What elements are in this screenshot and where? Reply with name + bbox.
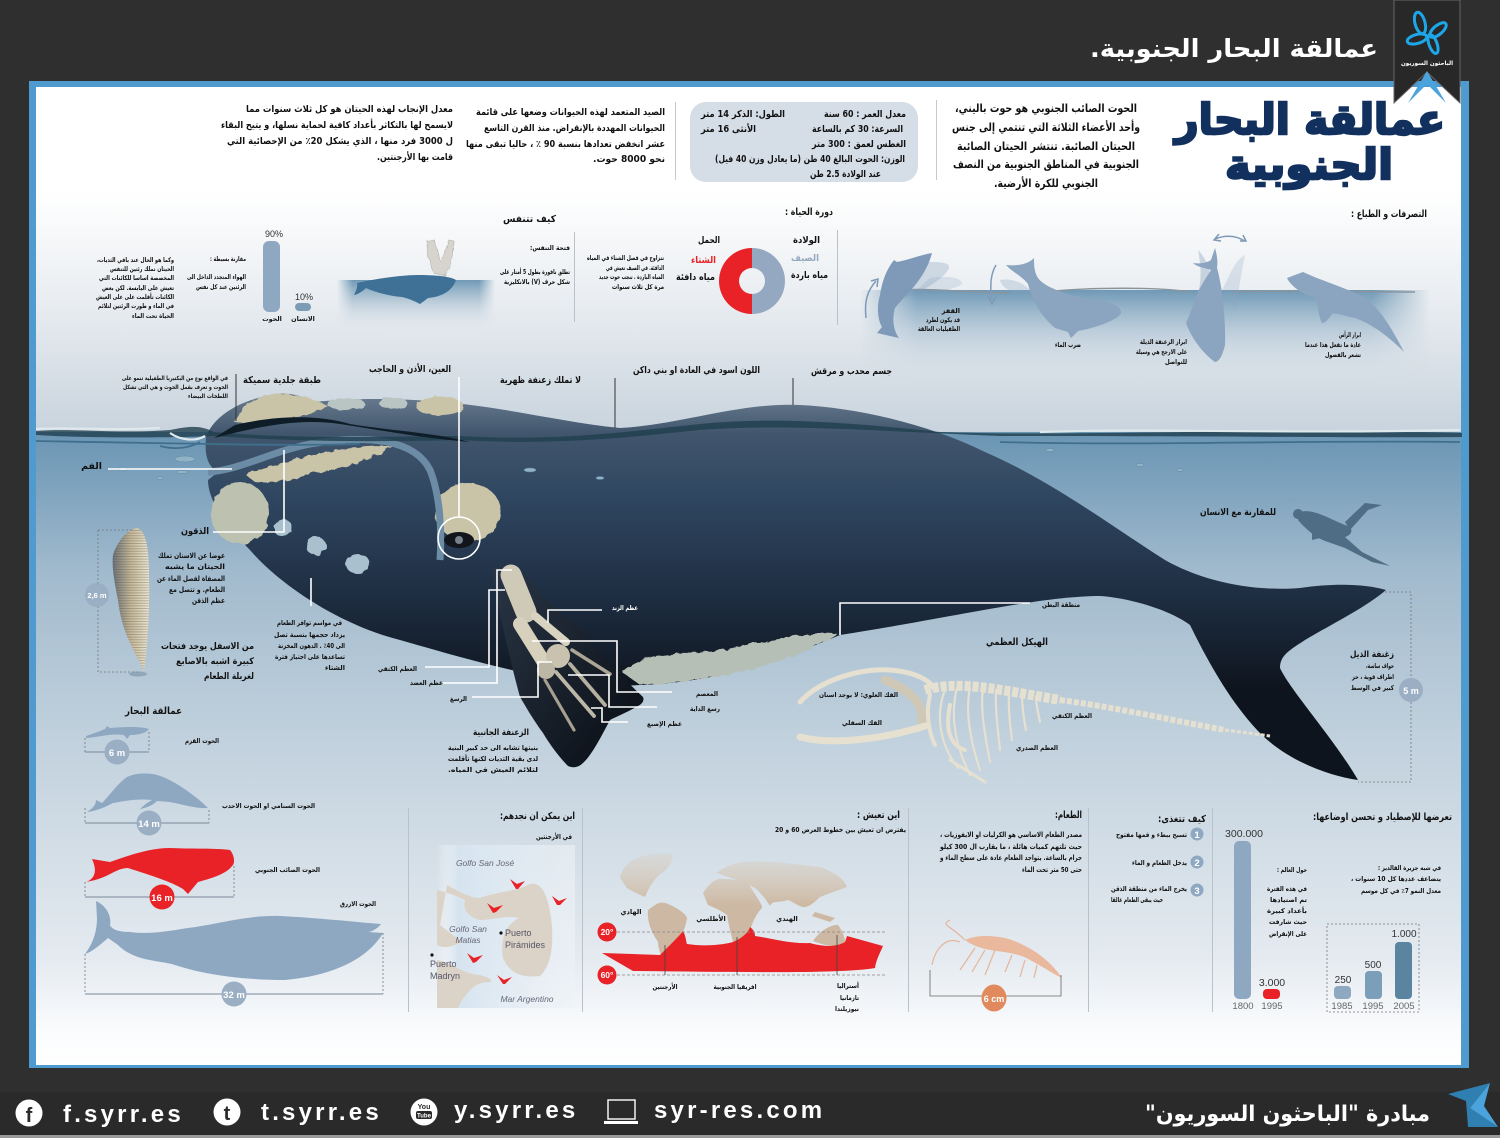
- blue whale: 32 m: [223, 990, 245, 1001]
- map: world: [598, 854, 887, 984]
- icon: diver: [1283, 489, 1390, 566]
- panel: food: [930, 810, 1082, 1012]
- dividers: [408, 808, 1213, 1012]
- text: world: في هذه الفترة: [1267, 885, 1307, 893]
- text: hunting: عشر انخفض تعدادها بنسبة 90 ٪ ، حاليا تبقى منها: [466, 139, 665, 150]
- panel: food: الطعام:: [1055, 810, 1082, 821]
- text: head: [1305, 330, 1361, 359]
- stats box: الوزن: الحوت البالغ 40 طن (ما يعادل وزن 40 فيل): [715, 154, 905, 165]
- arrow: slap: [988, 265, 996, 304]
- bar chart: recovery: 1995: [1362, 1001, 1384, 1012]
- callout: thick skin: طبقة جلدية سميكة: [243, 375, 321, 386]
- blue whale: [85, 900, 383, 1006]
- text: life cycle: الدافئة. في الصيف تعيش في: [606, 264, 664, 272]
- text: tail: على الارجح هي وسيلة: [1136, 348, 1187, 356]
- bar chart: world population: 1995: [1261, 1001, 1283, 1012]
- intro text: الجنوبي للكرة الأرضية.: [994, 176, 1098, 190]
- text: world: على الإنقراض: [1269, 930, 1307, 938]
- callout: human comparison: للمقارنة مع الانسان: [1200, 507, 1276, 518]
- panel: life cycle: مياه دافئة: [676, 272, 715, 283]
- panel: how it feeds: 3: [1194, 886, 1200, 897]
- panel: where they live: اين تعيش :: [857, 810, 900, 821]
- callout: body shape: [793, 366, 892, 405]
- panel: how it feeds: كيف تتغذى:: [1158, 814, 1206, 825]
- icon: whale markers: [467, 879, 567, 984]
- panel: where to find them: [430, 811, 575, 1008]
- bar chart: lungs: الانسان: [291, 315, 315, 323]
- bar chart: world population: 3.000: [1259, 977, 1285, 989]
- text: baleen gaps: من الاسفل يوجد فتحات: [161, 642, 254, 652]
- text: head: عادة ما تفعل هذا عندما: [1305, 341, 1361, 349]
- map: Argentina: Madryn: [430, 971, 460, 981]
- flipper: [492, 568, 643, 767]
- text: head: ابراز الرأس: [1339, 330, 1361, 339]
- text: flipper: بنيتها تشابه الى حد كبير البنية: [448, 744, 538, 752]
- text: skin parasites: في الواقع نوع من البكتيريا الطفيلية تنمو على: [122, 375, 228, 382]
- humpback: [85, 773, 315, 836]
- text: head: تشعر بالفضول: [1325, 351, 1361, 359]
- panel: how it feeds: يدخل الطعام و الماء: [1132, 859, 1187, 867]
- panel: how it feeds: 2: [1194, 858, 1200, 869]
- panel: how it feeds: 1: [1194, 830, 1200, 841]
- text: baleen gaps: [161, 642, 255, 682]
- pygmy whale: الحوت القزم: [185, 737, 219, 745]
- text: world: تم اصتيادها: [1270, 896, 1307, 904]
- icon: tail slap whale: [1000, 258, 1121, 338]
- callout: fat: يزداد حجمها بنسبة تصل: [274, 631, 345, 639]
- text: Valdes: [1351, 864, 1441, 895]
- panel: life cycle: الولادة: [793, 235, 820, 246]
- lip: [208, 440, 441, 560]
- ribs: [940, 688, 1040, 775]
- icon: facebook: [16, 1100, 42, 1127]
- intro text: الحيتان الصائبة. تنتشر الحيتان الصائبة: [957, 139, 1135, 153]
- stats box: [690, 102, 918, 182]
- bar chart: lungs: 90%: [265, 229, 283, 239]
- callout: baleen: [181, 450, 284, 537]
- flipper bone labels: رسغ الداية: [690, 705, 720, 713]
- text: Valdes: يتضاعف عددها كل 10 سنوات ،: [1351, 875, 1441, 883]
- text: hunting: نحو 8000 حوت.: [593, 154, 665, 165]
- text: baleen: [157, 551, 225, 605]
- illustration: right whale: [206, 394, 1386, 780]
- text: Valdes: معدل النمو 7٪ في كل موسم: [1361, 887, 1441, 895]
- blue whale: الحوت الازرق: [340, 900, 376, 908]
- panel: hunting and recovery: [1225, 812, 1452, 1012]
- map: Argentina: Mar Argentino: [500, 994, 554, 1004]
- pygmy whale: 6 m: [109, 748, 125, 759]
- text: comparison: الهواء المتجدد الداخل الى: [187, 273, 246, 281]
- intro text: وأحد الأعضاء الثلاثة التي تنتمي إلى جنس: [952, 120, 1140, 134]
- stats box: عند الولادة 2.5 طن: [810, 169, 881, 180]
- belly patch: [622, 633, 838, 685]
- callout: tail: زغنفة الذيل: [1350, 650, 1394, 660]
- stats box: الطول: الذكر 14 متر: [700, 109, 785, 120]
- text: baleen gaps: لغربلة الطعام: [204, 672, 254, 682]
- map: world: 60°: [601, 970, 614, 980]
- stats box: معدل العمر : 60 سنة: [824, 109, 906, 120]
- text: life cycle: المياه الباردة . تنجب حوت جديد: [599, 273, 664, 281]
- text: flipper: لدى بقية الثديات لكنها تأقلمت: [448, 754, 538, 763]
- callout: body shape: جسم محدب و مرقش: [811, 366, 892, 377]
- stats box: الأنثى 16 متر: [700, 123, 756, 135]
- panel: how it feeds: حيث يبقى الطعام عالقا: [1111, 896, 1163, 904]
- southern right whale: [85, 848, 320, 910]
- text: tail: [1136, 338, 1187, 366]
- icon: youtube: [410, 1098, 438, 1126]
- panel: behaviours: التصرفات و الطباع :: [1351, 209, 1427, 220]
- text: lungs: تعيش على اليابسة. لكن بعض: [102, 284, 174, 292]
- icon: facebook: f: [26, 1105, 33, 1127]
- icon: spy hop whale: [1287, 272, 1404, 352]
- callout: no dorsal fin: لا تملك زعنفة ظهرية: [500, 375, 581, 386]
- text: skin parasites: اللطخات البيضاء: [188, 394, 228, 400]
- callout: colour: اللون اسود في العادة او بني داكن: [633, 365, 760, 376]
- text: jump: الطفيليات العالقة: [918, 325, 960, 333]
- callosities: [211, 394, 501, 574]
- text: slap: ضرب الماء: [1055, 341, 1081, 349]
- text: life cycle: [587, 254, 664, 291]
- bubbles: [118, 448, 1183, 480]
- map: Argentina: Golfo San José: [456, 858, 514, 868]
- callout: belly: [840, 601, 1080, 635]
- text: flipper: [448, 728, 538, 774]
- humpback: الحوت السنامي او الحوت الاحدب: [222, 802, 315, 810]
- text: jump: قد يكون لطرد: [926, 316, 960, 324]
- flipper bone labels: العظم الكتفي: [378, 665, 417, 673]
- text: reproduction: معدل الإنجاب لهذه الحيتان هو كل ثلاث سنوات مما: [246, 104, 453, 115]
- pygmy whale: [85, 726, 219, 764]
- ribbon logo: [1394, 0, 1460, 103]
- panel: how it feeds: يخرج الماء من منطقة الذقن: [1111, 885, 1187, 893]
- stats box: الغطس لعمق : 300 متر: [811, 139, 906, 150]
- text: lungs: الحيتان تملك رئتين للتنفس: [110, 265, 174, 273]
- icon: baleen plate: [85, 528, 149, 676]
- arrow: double: [1214, 234, 1246, 241]
- icon: breach whale: [877, 253, 962, 338]
- text: reproduction: ل 3000 فرد منها ، الذي يشكل 20٪ من الإحصائية التي: [227, 136, 453, 147]
- callout: fat: [274, 578, 345, 672]
- icon: eye: [438, 517, 480, 559]
- icon: twitter: t: [224, 1103, 231, 1125]
- panel: life cycle: [574, 207, 838, 325]
- panel: life cycle: دورة الحياة :: [785, 207, 833, 218]
- bar chart: world population: 300.000: [1225, 828, 1263, 840]
- map: Argentina: Golfo San: [449, 924, 487, 934]
- panel: giants of the sea: عمالقة البحار: [124, 706, 182, 717]
- illustration: skeleton: العظم الصدري: [1016, 744, 1058, 752]
- panel: where they live: الهادي: [620, 908, 642, 916]
- text: lungs: وكما هو الحال عند باقي الثديات،: [97, 256, 174, 264]
- text: baleen: عوضا عن الاسنان تملك: [158, 551, 225, 560]
- text: baleen: عظم الذقن: [192, 596, 225, 605]
- panel: where they live: افريقيا الجنوبية: [714, 983, 756, 991]
- panel: giants of the sea: [85, 706, 383, 1006]
- text: skin parasites: [122, 375, 228, 400]
- text: flipper: الزعنفة الجانبية: [473, 728, 529, 738]
- southern right whale: الحوت الصائب الجنوبي: [255, 866, 320, 874]
- bar chart: recovery: 1.000: [1391, 929, 1417, 940]
- panel: where they live: [598, 810, 906, 1013]
- panel: where they live: الأرجنتين: [652, 982, 678, 991]
- text: comparison: مقارنة بسيطة :: [210, 255, 246, 263]
- footer: [0, 1083, 1500, 1138]
- panel: food: 6 cm: [984, 994, 1004, 1004]
- text: baleen: المصفاة لفصل الماء عن: [157, 574, 225, 583]
- footer: y.syrr.es: [454, 1097, 578, 1124]
- bar chart: lungs: الحوت: [262, 315, 282, 323]
- main title: الجنوبية: [1225, 140, 1393, 190]
- illustration: whale blowing: [338, 239, 494, 320]
- panel: life cycle: الحمل: [698, 235, 720, 246]
- text: tail: للتواصل: [1165, 358, 1187, 366]
- text: life cycle: مرة كل ثلاث سنوات: [612, 283, 664, 291]
- callout: tail: [1350, 592, 1423, 782]
- panel: food: جرام بالساعة. يتواجد الطعام عادة على سطح الماء و: [939, 854, 1082, 862]
- callout: belly: منطقة البطن: [1042, 601, 1080, 609]
- text: blowhole: شكل حرف (V) بالانكليزية: [504, 278, 570, 286]
- footer: syr-res.com: [654, 1097, 825, 1124]
- footer: f.syrr.es: [63, 1101, 184, 1128]
- panel: food: حيث تلتهم كميات هائلة ، ما يقارب ال 300 كيلو: [939, 843, 1082, 851]
- callout: tail: حواف ساسة،: [1366, 662, 1394, 670]
- panel: how it feeds: [1111, 814, 1206, 904]
- text: world: بأعداد كبيرة: [1267, 906, 1307, 915]
- southern right whale: 16 m: [151, 893, 173, 904]
- panel: breathing: [337, 214, 570, 330]
- bar chart: world population: 1800: [1232, 1001, 1254, 1012]
- text: blowhole: [500, 244, 570, 286]
- panel: how it feeds: تسبح ببطء و فمها مفتوح: [1116, 831, 1187, 839]
- icon: laptop: [604, 1100, 638, 1124]
- callout: fat: في مواسم توافر الطعام: [277, 619, 342, 627]
- panel: where to find them: اين يمكن ان نجدهم:: [500, 811, 575, 822]
- ribbon logo: الباحثون السوريون: [1401, 61, 1453, 67]
- icon: tail display whale: [1186, 248, 1245, 362]
- spine: [925, 686, 1270, 736]
- map: Argentina: Matias: [455, 935, 481, 945]
- callout: fat: الى 40٪ . الدهون المخزنة: [278, 642, 345, 650]
- main title: عمالقة البحار: [1173, 95, 1445, 144]
- text: Valdes: في شبه جزيرة الفالديز :: [1378, 864, 1441, 872]
- text: baleen: الطعام. و تتصل مع: [169, 585, 225, 594]
- callout: tail: 5 m: [1403, 686, 1419, 696]
- text: comparison: الرئتين عند كل نفس: [196, 283, 246, 291]
- text: blowhole: فتحة التنفس:: [530, 244, 570, 252]
- skull and jaws: [800, 670, 935, 745]
- text: hunting: الحيوانات المهددة بالإنقراض. منذ القرن التاسع: [484, 123, 665, 134]
- bar chart: recovery: 1985: [1331, 1001, 1353, 1012]
- text: world: [1267, 866, 1307, 938]
- main title: [1173, 95, 1445, 190]
- text: comparison: [187, 255, 246, 291]
- icon: flower logo: [1406, 11, 1449, 55]
- illustration: skeleton: الفك العلوي: لا يوجد اسنان: [819, 691, 898, 699]
- panel: life cycle: الصيف: [791, 253, 819, 264]
- panel: hunting and recovery: تعرضها للإصطياد و تحسن اوضاعها:: [1313, 812, 1452, 823]
- panel: food: مصدر الطعام الاساسي هو الكرليات او الايفوزيات ،: [940, 831, 1082, 839]
- panel: where they live: نيوزيلندا: [835, 1005, 859, 1013]
- bar chart: lungs: 10%: [295, 292, 313, 302]
- text: reproduction: لايسمح لها بالتكاثر بأعداد كافية لحماية نسلها، و يتيح البقاء: [221, 118, 453, 131]
- illustration: skeleton: [800, 637, 1270, 782]
- map: Argentina: Pirámides: [505, 940, 546, 950]
- intro text: الجنوبية في المناطق الجنوبية من النصف: [953, 157, 1139, 171]
- text: lungs: الكائنات تأقلمت على على العيش: [96, 292, 174, 301]
- scale marker: [982, 984, 1006, 1012]
- illustration: skeleton: العظم الكتفي: [1052, 712, 1092, 720]
- illustration: skeleton: الفك السفلي: [842, 719, 882, 727]
- text: hunting: [466, 102, 676, 180]
- text: lungs: [96, 256, 174, 320]
- text: life cycle: تتزاوج في فصل الشتاء في المياه: [587, 254, 664, 262]
- icon: krill: [932, 920, 1062, 978]
- icon: youtube: You: [418, 1104, 430, 1111]
- callout: mouth: الفم: [81, 461, 102, 472]
- map: Argentina: Puerto: [505, 928, 532, 938]
- map: world: 20°: [601, 927, 614, 937]
- illustration: skeleton: الهيكل العظمي: [986, 637, 1048, 648]
- callout: eye: العين، الأذن و الحاجب: [369, 363, 451, 375]
- text: lungs: الحياة تحت الماء: [132, 312, 174, 320]
- flipper bone labels: المعصم: [696, 690, 718, 698]
- callout: fat: الشتاء: [325, 664, 345, 672]
- bar chart: lungs: [262, 229, 315, 323]
- text: baleen gaps: كبيرة اشبه بالاصابع: [176, 657, 255, 667]
- icon: baleen plate: 2,6 m: [87, 591, 107, 600]
- panel: where to find them: في الأرجنتين: [536, 832, 572, 841]
- text: jump: القفز: [941, 307, 960, 315]
- panel: where they live: يفترض ان تعيش بين خطوط العرض 60 و 20: [775, 826, 906, 834]
- text: jump: [918, 307, 960, 333]
- intro text: الحوت الصائب الجنوبي هو حوت باليني،: [955, 101, 1137, 115]
- panel: breathing: كيف تتنفس: [503, 214, 556, 225]
- header title: عمالقة البحار الجنوبية.: [1090, 34, 1378, 64]
- icon: twitter: [214, 1098, 240, 1126]
- flipper bone labels: عظم الإصبع: [647, 720, 682, 728]
- text: flipper: لتلائم العيش في المياه.: [448, 766, 538, 774]
- text: tail: ابراز الزعنفة الذيلة: [1140, 338, 1187, 346]
- icon: youtube: Tube: [417, 1114, 432, 1120]
- footer: t.syrr.es: [261, 1099, 382, 1126]
- text: lungs: المخصصة اساسا للكائنات التي: [99, 274, 174, 282]
- text: world: حول العالم :: [1277, 866, 1307, 874]
- footer initiative text: مبادرة "الباحثون السوريون": [1145, 1102, 1430, 1127]
- map: Argentina: Puerto: [430, 959, 457, 969]
- panel: food: حتى 50 متر تحت الماء: [1022, 866, 1082, 874]
- panel: where they live: الهندي: [776, 915, 798, 923]
- water surface: [36, 417, 1462, 448]
- arrow: jump: [865, 279, 878, 318]
- stats box: السرعة: 30 كم بالساعة: [812, 124, 903, 135]
- bar chart: world population: [1225, 828, 1285, 1012]
- panel: where they live: أستراليا: [837, 981, 859, 990]
- text: baleen: الحيتان ما يشبه: [165, 562, 225, 571]
- flipper bones: [511, 575, 610, 730]
- callout: tail: اطراف قوية ، حز: [1351, 673, 1394, 681]
- map: Argentina: [430, 845, 575, 1008]
- text: hunting: الصيد المتعمد لهذه الحيوانات وضعها على قائمة: [476, 107, 665, 118]
- flipper bone labels: [378, 570, 720, 728]
- panel: where they live: تازمانيا: [840, 994, 859, 1002]
- icon: footer logo: [1448, 1083, 1498, 1127]
- callout: thick skin: [236, 374, 321, 421]
- panel: life cycle: مياه باردة: [791, 270, 828, 281]
- callout: baleen: الذقون: [181, 526, 209, 537]
- bar chart: recovery: 500: [1365, 960, 1382, 971]
- flipper bone labels: عظم الزند: [612, 604, 638, 612]
- flipper bone labels: عظم العضد: [410, 679, 443, 687]
- intro text: [952, 101, 1140, 190]
- callout: tail: كبير في الوسط: [1351, 684, 1394, 692]
- bar chart: recovery: 2005: [1393, 1001, 1415, 1012]
- donut chart: [719, 248, 785, 314]
- bar chart: recovery: 250: [1335, 975, 1352, 986]
- callout: fat: تساعدها على اجتياز فترة: [275, 653, 345, 661]
- text: reproduction: [221, 104, 453, 163]
- panel: behaviours: [860, 209, 1430, 380]
- panel: life cycle: الشتاء: [691, 255, 716, 266]
- text: lungs: في الماء و طورت الرئتين لتلائم: [98, 302, 174, 310]
- text: blowhole: تطلق نافورة بطول 5 أمتار على: [500, 267, 570, 276]
- pelvis and sternum: [948, 705, 985, 782]
- flipper bone labels: الرسغ: [450, 695, 467, 703]
- text: reproduction: قامت بها الأرجنتين.: [377, 151, 453, 163]
- text: world: حيث شارفت: [1269, 918, 1307, 926]
- bar chart: recovery: [1327, 924, 1419, 1012]
- panel: where they live: الأطلسي: [696, 914, 726, 923]
- text: skin parasites: الحوت و تعرف بقمل الحوت و هي التي تشكل: [123, 384, 228, 391]
- humpback: 14 m: [138, 819, 160, 830]
